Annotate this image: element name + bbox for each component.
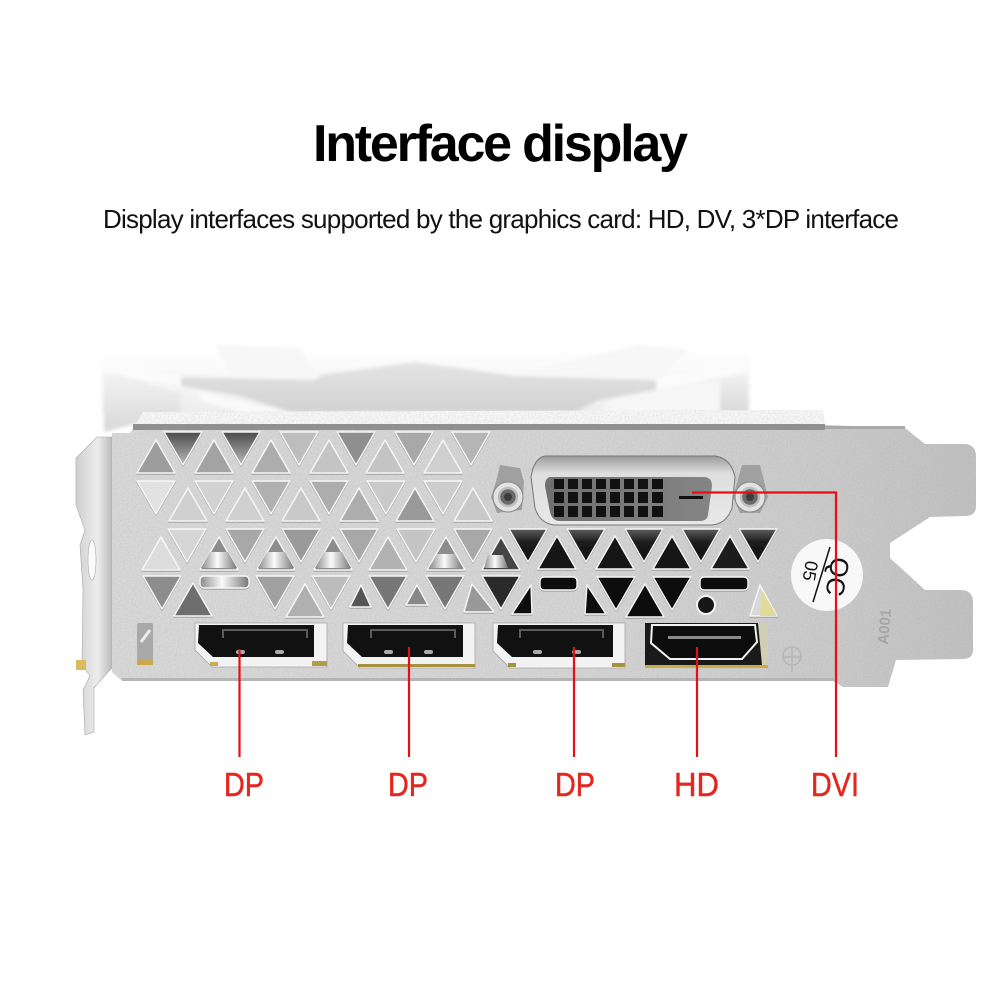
callout: DP 2: DP <box>388 766 428 803</box>
DVI shell <box>531 456 735 525</box>
DVI connector <box>491 456 768 525</box>
plate top fold <box>135 410 825 425</box>
triangular vent grille <box>137 432 777 617</box>
DVI pin grid <box>554 479 663 517</box>
title: Interface display <box>313 115 688 173</box>
capacitor tops seen through vents <box>201 552 508 568</box>
DisplayPort 2 <box>343 623 475 668</box>
bracket plate <box>112 410 976 687</box>
DisplayPort 3 <box>493 623 625 668</box>
callout: DP 3: DP <box>555 766 595 803</box>
mounting hole <box>697 596 715 614</box>
QC sticker <box>791 539 863 611</box>
QC sticker: QC <box>819 555 856 599</box>
HDMI port <box>645 623 768 668</box>
vent row 2 <box>137 481 492 521</box>
callout: HD: HD <box>674 766 719 803</box>
ground symbol <box>782 647 802 672</box>
DVI blade <box>679 496 703 499</box>
DVI face <box>545 477 712 521</box>
DVI right screw <box>733 465 768 513</box>
DisplayPort 1 <box>195 623 327 667</box>
infographic canvas <box>76 124 976 796</box>
vent row 1 <box>137 432 490 473</box>
callout: DVI: DVI <box>811 766 859 803</box>
embossed A001 mark: A001 <box>875 608 895 645</box>
faded graphics card behind bracket <box>102 345 750 432</box>
DVI left screw <box>491 465 524 513</box>
small left slot <box>137 623 153 665</box>
vent row 3 <box>142 529 777 570</box>
bracket mounting flange <box>76 437 112 735</box>
graphics card bracket <box>76 405 980 735</box>
flange slot <box>88 540 96 580</box>
subtitle: Display interfaces supported by the graphics card: HD, DV, 3*DP interface <box>103 204 899 234</box>
callout: DVI <box>692 492 859 803</box>
QC sticker: 05 <box>799 559 822 583</box>
flange brass tab <box>76 660 86 670</box>
callout: DP 1: DP <box>224 766 264 803</box>
brushed metal texture <box>100 405 980 690</box>
vent row 4 <box>143 576 777 617</box>
